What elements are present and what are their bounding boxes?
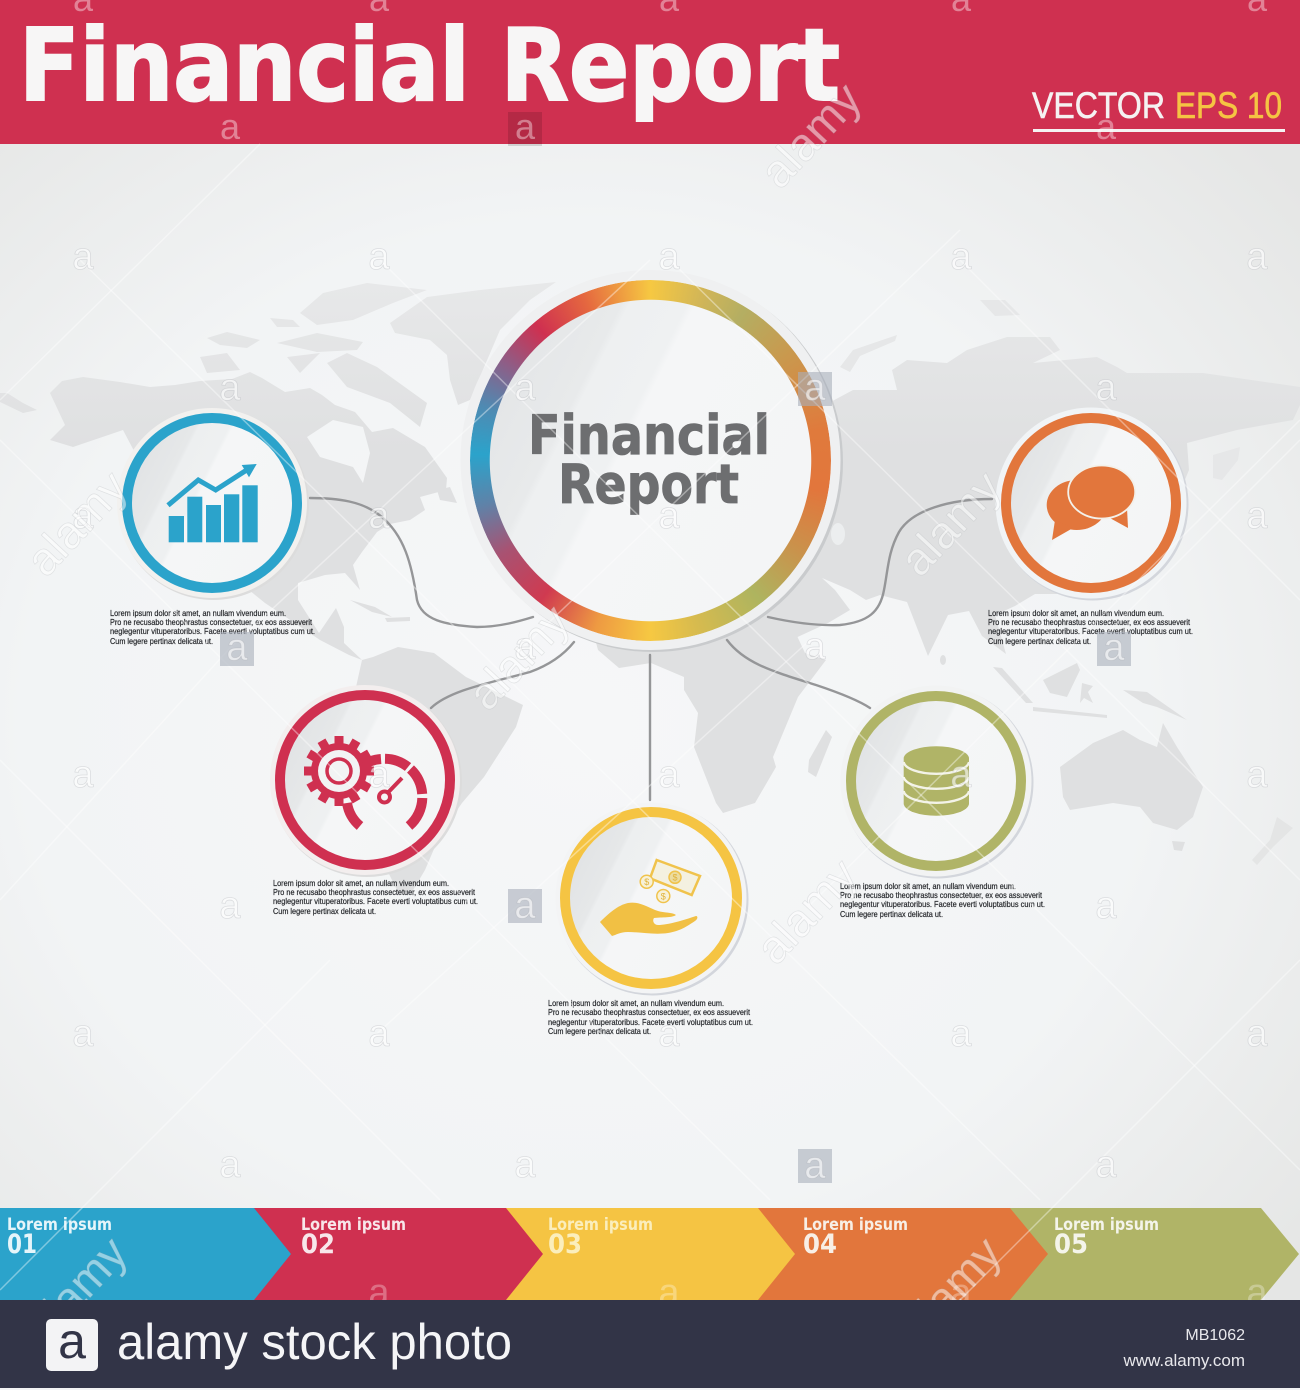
watermark: body letters: a: [368, 236, 390, 278]
watermark: arrow letters: a: [368, 1272, 390, 1314]
connector: orange circle to center: [768, 499, 992, 625]
icon: hand with money: $: [661, 892, 666, 902]
arrow 05: [1000, 1208, 1299, 1300]
arrow 04: [750, 1208, 1048, 1300]
map: Black Sea: [831, 523, 845, 545]
watermark: diagonal alamy: [15, 72, 1011, 1352]
text block: red: [273, 879, 478, 916]
map: Japan and Sakhalin: [1213, 447, 1240, 480]
watermark: body letters: a: [514, 367, 536, 409]
badge: vector eps 10: EPS 10: [1175, 85, 1282, 126]
website: www.alamy.com: [1122, 1351, 1245, 1370]
watermark: body letters: a: [368, 754, 390, 796]
watermark: header letters: a: [220, 106, 241, 147]
text block: blue: Pro ne recusabo theophrastus consectetuer, ex eos assueverit: [110, 618, 313, 627]
watermark: diagonal alamy: alamy: [15, 460, 137, 586]
map: Sumatra: [993, 667, 1033, 703]
icon: database: [904, 746, 969, 816]
watermark: diagonal alamy: alamy: [889, 460, 1011, 586]
map: New Guinea: [1123, 690, 1187, 720]
watermark: body letters: a: [804, 626, 826, 668]
text block: green: neglegentur vituperatoribus. Facete everti voluptatibus cum ut.: [840, 900, 1045, 909]
watermark: diagonal alamy: alamy: [457, 594, 579, 720]
map: arctic islands: [200, 283, 457, 503]
watermark: arrow letters: a: [950, 1272, 972, 1314]
arrow 02: 02: [301, 1229, 335, 1260]
watermark: diagonal alamy: alamy: [889, 1226, 1011, 1352]
map: Sri Lanka: [940, 655, 946, 665]
badge: vector eps 10: VECTOR: [1032, 85, 1165, 126]
watermark: body letters: a: [368, 495, 390, 537]
arrow 04: 04: [803, 1229, 837, 1260]
circle: blue chart: [117, 408, 309, 600]
circle: yellow money: [556, 802, 748, 996]
text block: blue: [110, 609, 315, 646]
badge: vector eps 10: [1032, 85, 1285, 132]
watermark: body letters: a: [514, 885, 536, 927]
watermark: body letters: a: [368, 1013, 390, 1055]
watermark: diagonal alamy: alamy: [745, 848, 867, 974]
watermark: body letters: a: [1246, 1013, 1268, 1055]
arrow 01: 01: [7, 1229, 37, 1260]
watermark: body letters: a: [1095, 885, 1117, 927]
watermark: header letters: [73, 0, 1268, 147]
watermark: body letters: a: [72, 236, 94, 278]
watermark: body letters: a: [219, 367, 241, 409]
arrow 01: Lorem ipsum: [7, 1215, 112, 1235]
map: Madagascar: [808, 730, 832, 777]
connector: green circle to center: [727, 640, 870, 708]
text block: green: Pro ne recusabo theophrastus consectetuer, ex eos assueverit: [840, 891, 1043, 900]
connector: blue circle to center: [310, 498, 533, 627]
center title: Financial: [528, 404, 770, 467]
icon: hand with money: $: [672, 872, 678, 882]
text block: red: Pro ne recusabo theophrastus consectetuer, ex eos assueverit: [273, 888, 476, 897]
arrow 03: 03: [548, 1229, 582, 1260]
text block: yellow: Cum legere pertinax delicata ut.: [548, 1027, 651, 1036]
text block: blue: neglegentur vituperatoribus. Facete everti voluptatibus cum ut.: [110, 627, 315, 636]
arrow 04: Lorem ipsum: [803, 1215, 908, 1235]
text block: green: Lorem ipsum dolor sit amet, an nullam vivendum eum.: [840, 882, 1016, 891]
text block: red: Cum legere pertinax delicata ut.: [273, 907, 376, 916]
watermark: body letters: a: [804, 1145, 826, 1187]
arrow 05: 05: [1054, 1229, 1088, 1260]
map: Celebes: [1080, 683, 1093, 703]
watermark: body letters: a: [950, 1013, 972, 1055]
arrow 02: [250, 1208, 543, 1300]
watermark: header letters: a: [1096, 106, 1117, 147]
watermark: body letters: a: [72, 754, 94, 796]
text block: red: neglegentur vituperatoribus. Facete everti voluptatibus cum ut.: [273, 897, 478, 906]
watermark: diagonal alamy: alamy: [15, 1226, 137, 1352]
watermark: body letters: a: [1095, 367, 1117, 409]
image id: MB1062: [1185, 1327, 1245, 1344]
arrow bar: [0, 1208, 1299, 1300]
watermark: body letters: a: [72, 1013, 94, 1055]
watermark: body letters: a: [1246, 495, 1268, 537]
circle: green database: [840, 686, 1034, 878]
map: Tasmania: [1172, 841, 1185, 851]
map: Australia: [1060, 723, 1203, 830]
watermark: body letters: a: [72, 495, 94, 537]
watermark: body letters: a: [658, 754, 680, 796]
world map: [0, 282, 1300, 892]
text block: blue: Cum legere pertinax delicata ut.: [110, 637, 213, 646]
map: Eurasia: [760, 337, 1300, 656]
watermark: header letters: a: [515, 106, 536, 147]
icon: chat bubbles: [1047, 466, 1135, 540]
watermark: body letters: a: [658, 1013, 680, 1055]
icon: gear and gauge: [304, 736, 422, 826]
watermark: body letters: a: [226, 627, 248, 669]
text block: orange: Lorem ipsum dolor sit amet, an nullam vivendum eum.: [988, 609, 1164, 618]
center title: [528, 404, 770, 516]
watermark: arrow letters: [368, 1272, 1268, 1314]
connector: yellow circle to center: [649, 655, 651, 800]
map: Java: [1033, 707, 1107, 718]
watermark: body letters: a: [219, 885, 241, 927]
main title: Financial Report: [19, 7, 840, 124]
text block: orange: Cum legere pertinax delicata ut.: [988, 637, 1091, 646]
icon: hand with money: $: [644, 877, 649, 887]
map: Borneo: [1043, 663, 1080, 697]
icon: bar chart with arrow: [168, 464, 258, 542]
watermark: diagonal alamy: alamy: [749, 72, 871, 198]
connector lines: [310, 498, 992, 800]
watermark: body letters: [72, 236, 1268, 1187]
map: Caribbean islands: [350, 600, 410, 622]
text block: yellow: [548, 999, 753, 1036]
watermark: body letters: a: [514, 626, 536, 668]
circle: red gears: [270, 685, 462, 877]
map: New Zealand: [1252, 817, 1293, 865]
logo tile: a: [58, 1313, 86, 1369]
arrow 05: Lorem ipsum: [1054, 1215, 1159, 1235]
watermark: arrow letters: a: [1246, 1272, 1268, 1314]
watermark: body letters: a: [1246, 236, 1268, 278]
map: Novaya Zemlya: [840, 335, 897, 372]
central gradient ring: [470, 280, 831, 640]
footer band: [0, 1300, 1300, 1388]
watermark: body letters: a: [950, 754, 972, 796]
header band: [0, 0, 1300, 144]
text block: orange: [988, 609, 1193, 646]
text block: red: Lorem ipsum dolor sit amet, an nullam vivendum eum.: [273, 879, 449, 888]
circle: orange chat: [996, 408, 1188, 600]
watermark: body letters: a: [658, 236, 680, 278]
arrow 03: Lorem ipsum: [548, 1215, 653, 1235]
center title: Report: [558, 453, 739, 516]
watermark: header tile: [508, 112, 542, 146]
watermark: body letters: a: [950, 236, 972, 278]
map: Chukotka wrap: [0, 393, 37, 413]
text block: blue: Lorem ipsum dolor sit amet, an nullam vivendum eum.: [110, 609, 286, 618]
icon: hand with money: [600, 860, 700, 936]
watermark: body letters: a: [1095, 1144, 1117, 1186]
text block: orange: Pro ne recusabo theophrastus consectetuer, ex eos assueverit: [988, 618, 1191, 627]
text block: green: [840, 882, 1045, 919]
map: North America: [50, 372, 447, 660]
logo tile: [46, 1313, 98, 1371]
arrow 03: [500, 1208, 795, 1300]
connector: red circle to center: [431, 642, 574, 708]
text block: orange: neglegentur vituperatoribus. Facete everti voluptatibus cum ut.: [988, 627, 1193, 636]
watermark: body letters: a: [804, 367, 826, 409]
watermark: body letters: a: [658, 495, 680, 537]
footer wordmark: alamy stock photo: [117, 1314, 512, 1370]
central circle backing: [460, 270, 843, 652]
watermark: body letters: a: [1246, 754, 1268, 796]
text block: green: Cum legere pertinax delicata ut.: [840, 910, 943, 919]
map: South America: [352, 647, 523, 892]
watermark: body letters: a: [514, 1144, 536, 1186]
map: Svalbard: [980, 300, 1020, 316]
arrow 02: Lorem ipsum: [301, 1215, 406, 1235]
arrow 01: [0, 1208, 291, 1300]
watermark: body letters: a: [1103, 627, 1125, 669]
text block: yellow: neglegentur vituperatoribus. Facete everti voluptatibus cum ut.: [548, 1018, 753, 1027]
watermark: body letters: a: [219, 1144, 241, 1186]
map: Greenland: [390, 282, 556, 405]
map: Africa: [590, 575, 826, 813]
text block: yellow: Pro ne recusabo theophrastus consectetuer, ex eos assueverit: [548, 1008, 751, 1017]
watermark: arrow letters: a: [658, 1272, 680, 1314]
text block: yellow: Lorem ipsum dolor sit amet, an nullam vivendum eum.: [548, 999, 724, 1008]
watermark: tiles: [220, 372, 1131, 1183]
